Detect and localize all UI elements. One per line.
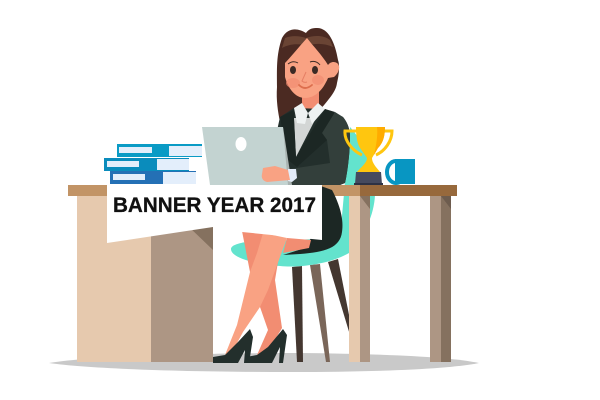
hand [262, 166, 290, 182]
banner text: BANNER YEAR 2017 [113, 194, 316, 217]
books [104, 144, 202, 184]
mug [387, 159, 415, 184]
chair [231, 127, 375, 362]
skirt [283, 185, 343, 255]
trophy [345, 127, 392, 185]
neck [302, 92, 319, 114]
middle book [104, 158, 189, 171]
desk back leg [430, 196, 451, 362]
hair highlight [282, 36, 333, 48]
back leg [242, 231, 282, 355]
nose [302, 72, 307, 82]
woman [202, 28, 350, 363]
mug handle [387, 161, 405, 183]
banner shape [107, 185, 322, 243]
desk top [68, 185, 457, 196]
shirt [294, 118, 316, 157]
top book [117, 144, 202, 157]
desk left pedestal [77, 196, 213, 362]
front leg [225, 233, 287, 355]
jacket [275, 108, 350, 185]
bottom book [110, 171, 196, 184]
shoe right [246, 329, 287, 363]
chair seat and back [231, 127, 375, 266]
face [285, 38, 339, 98]
shirt cuff [288, 169, 297, 182]
trophy foot [354, 183, 383, 185]
mouth [299, 85, 312, 88]
banner [107, 185, 322, 243]
hair [277, 28, 339, 122]
laptop [202, 127, 292, 185]
trophy handles [345, 131, 392, 155]
trophy cup shade [374, 127, 385, 155]
blush [286, 75, 324, 88]
shoe left [213, 329, 253, 363]
thigh shadow [283, 238, 311, 253]
chair legs [292, 259, 351, 362]
eyes and brows [288, 61, 320, 74]
jacket sleeve [290, 112, 350, 185]
trophy cup [356, 127, 385, 172]
desk [68, 185, 457, 362]
jacket lapels [280, 109, 335, 167]
floor shadow [49, 353, 479, 372]
desk front leg [349, 196, 370, 362]
trophy base [355, 172, 382, 184]
mug body [395, 159, 415, 184]
shirt collar [294, 103, 325, 124]
laptop logo [236, 137, 246, 151]
